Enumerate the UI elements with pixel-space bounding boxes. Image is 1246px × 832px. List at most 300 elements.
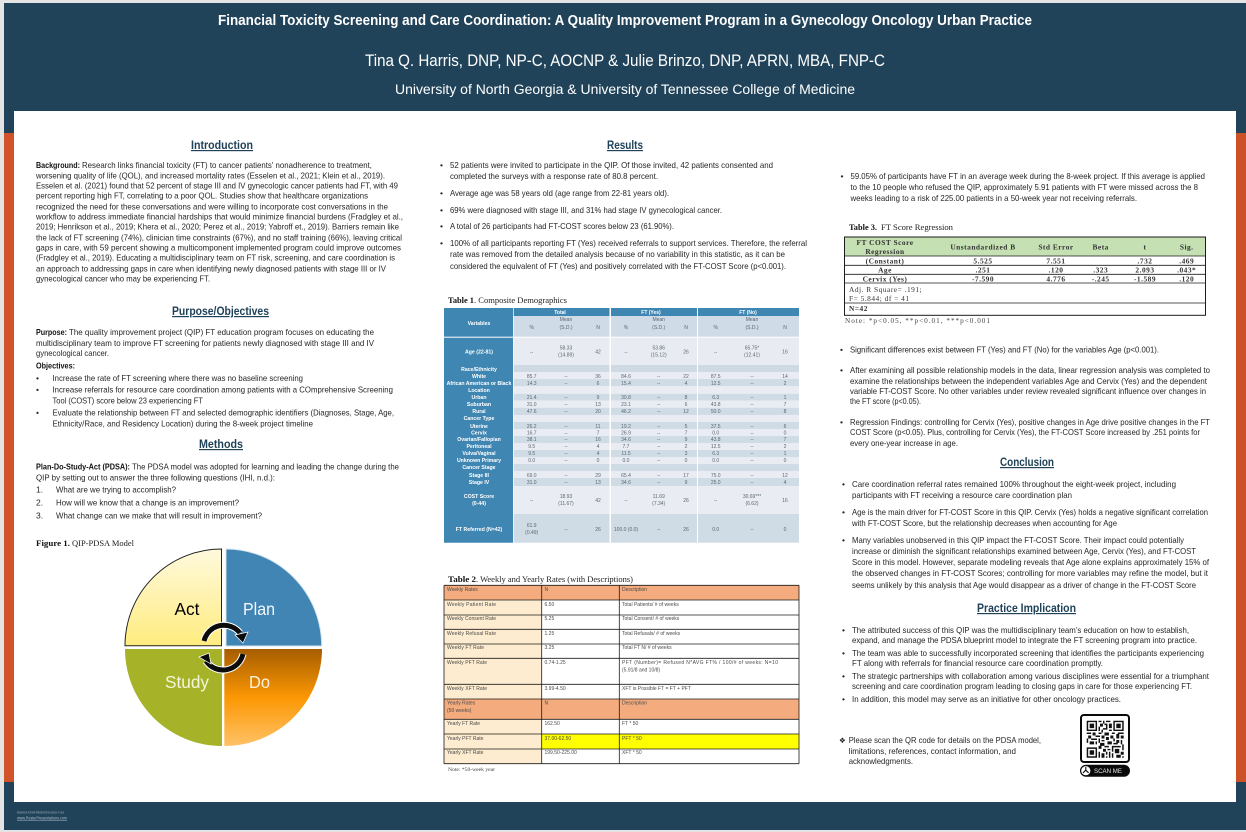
table 1: composite demographics: -- <box>714 350 718 356</box>
table 3: FT score regression: 7.551 <box>1046 256 1066 266</box>
table 1: composite demographics: -- <box>564 458 568 464</box>
text: significance and regression bullets: • <box>840 365 843 375</box>
table 1: composite demographics: -- <box>750 473 754 479</box>
table 1: composite demographics: 0 <box>597 458 600 464</box>
text: background paragraph: recognized the need for these conversations and were willing to incorporate cost conversations in the <box>36 202 388 212</box>
quadrant: Do <box>224 649 322 746</box>
text: weekly FT average bullet: to the 10 people who refused the QIP, approximately 5.91 patients with FT were missed across the 8 <box>850 182 1198 192</box>
table 1: composite demographics: 0.0 <box>712 458 719 464</box>
table 1: composite demographics: -- <box>564 374 568 380</box>
right orange side bar <box>1236 133 1246 782</box>
table 3: FT score regression: N=42 <box>849 304 868 313</box>
table 3: FT score regression: Regression <box>865 247 905 256</box>
footer credit: RESEARCH POSTER PRESENTATION DESIGN © 2019 <box>17 810 64 814</box>
table 1: composite demographics: -- <box>657 374 661 380</box>
table 3: FT score regression: F= 5.844; df = 41 <box>849 294 910 303</box>
text: purpose paragraph <box>36 327 374 358</box>
table 2: weekly and yearly rates: Total Patients/ # of weeks <box>622 602 679 608</box>
table 1: composite demographics: -- <box>750 444 754 450</box>
text: practice implication bullets: • <box>842 694 845 704</box>
text: results bullets: • <box>440 188 443 198</box>
table 1: composite demographics: -- <box>750 480 754 486</box>
table 2: weekly and yearly rates: 3.25 <box>544 645 554 651</box>
text: background paragraph: an approach to addressing gaps in care when identifying newly diagnosed patients with stage III or IV <box>36 264 386 274</box>
table 1: composite demographics: 26 <box>683 498 689 504</box>
table 1: composite demographics: 65.75* <box>745 346 759 352</box>
text: significance and regression bullets: COST Score (p<0.05). Plus, controlling for Cervix (Yes), the FT-COST Score increased by .251 points for <box>850 427 1200 437</box>
table 1: composite demographics: 26.2 <box>527 424 537 430</box>
table 1: composite demographics: -- <box>657 395 661 401</box>
text: results bullets: completed the surveys with a response rate of 80.8 percent. <box>450 171 658 181</box>
text: practice implication bullets: The attributed success of this QIP was the multidisciplinary team’s education on how to establish, <box>852 625 1189 635</box>
table 1: composite demographics: 58.33 <box>560 346 572 352</box>
text: significance and regression bullets: After examining all possible relationship models in the data, linear regression analysis was completed to <box>850 365 1210 375</box>
table 1: composite demographics: 53.86 <box>652 346 665 352</box>
text: results bullets: • <box>440 238 443 248</box>
table 3: FT score regression: Std Error <box>1038 242 1074 252</box>
table 1: composite demographics: COST Score <box>464 494 494 500</box>
text: background paragraph: Research links financial toxicity (FT) to cancer patients' nonadherence to treatment, <box>82 160 372 170</box>
table 1: composite demographics: 7 <box>597 430 600 436</box>
text: PDSA description <box>36 462 399 520</box>
text: objectives list: Increase referrals for resource care coordination among patients with a COmprehensive Screening <box>52 384 393 394</box>
text: objectives list <box>36 360 394 428</box>
text: background paragraph: the lack of FT screening (74%), clinician time constraints (67%), and no staff training (66%), leaving critical <box>36 232 402 242</box>
text: PDSA description: Plan-Do-Study-Act (PDSA): <box>36 462 130 472</box>
quadrant: Act <box>125 549 222 646</box>
table 1: composite demographics: 8 <box>784 409 787 415</box>
table 1: composite demographics: -- <box>750 458 754 464</box>
table 2 note: Note: *50-week year <box>448 767 495 773</box>
table 1: composite demographics: 18.93 <box>560 494 572 500</box>
table 2: weekly and yearly rates: N <box>544 587 548 593</box>
text: objectives list: • <box>36 373 39 383</box>
text: results bullets: considered the equivalent of FT (Yes) and positively correlated with the FT-COST Score (p<0.001). <box>450 261 786 271</box>
text: background paragraph: worsening quality of life (QOL), and increased mortality rates (Esselen et al., 2021; Klein et al., 2019). <box>35 170 385 180</box>
table 1: composite demographics: Ovarian/Fallopian <box>457 437 501 443</box>
table 1: composite demographics: 46.2 <box>621 409 631 415</box>
text: purpose paragraph: gynecological cancer. <box>36 348 109 358</box>
authors: Tina Q. Harris, DNP, NP-C, AOCNP & Julie Brinzo, DNP, APRN, MBA, FNP-C <box>365 52 885 70</box>
table 1: composite demographics: 21.4 <box>527 395 537 401</box>
table 1: composite demographics: Cancer Type <box>464 416 494 422</box>
table 1: composite demographics: (0-44) <box>472 501 486 507</box>
table 1: composite demographics: -- <box>657 451 661 457</box>
table 1: composite demographics: 9 <box>685 437 688 443</box>
table 1: composite demographics: -- <box>564 437 568 443</box>
table 1: composite demographics: 69.0 <box>527 473 537 479</box>
text: conclusion bullets: Age is the main driver for FT-COST Score in this QIP. Cervix (Yes) holds a negative significant correlation <box>852 507 1208 517</box>
table 2: weekly and yearly rates: Yearly PFT Rate <box>447 736 484 742</box>
text: results bullets: • <box>440 221 443 231</box>
text: significance and regression bullets: Significant differences exist between FT (Yes) and FT (No) for the variables Age (p<0.001). <box>850 344 1159 354</box>
table 1: composite demographics: 61.9 <box>527 523 537 529</box>
text: practice implication bullets: • <box>842 671 845 681</box>
table 1: composite demographics: % <box>624 325 629 331</box>
table 1: composite demographics: (0.49) <box>525 530 539 536</box>
figure caption <box>36 538 135 548</box>
arrow: clockwise top <box>204 625 248 643</box>
table 1: composite demographics: FT (Yes) <box>641 310 661 316</box>
text: background paragraph: Background: <box>36 160 80 170</box>
table 1: composite demographics: 1 <box>784 451 787 457</box>
text: objectives list: • <box>36 408 39 418</box>
table 1: composite demographics: -- <box>750 374 754 380</box>
text: significance and regression bullets <box>840 344 1210 448</box>
quadrant: Study <box>125 649 222 746</box>
table 1: composite demographics: 31.0 <box>527 480 537 486</box>
table 3 caption: FT Score Regression <box>881 222 954 232</box>
table 1: composite demographics: African American or Black <box>447 381 511 387</box>
quadrant: Plan <box>226 549 322 646</box>
text: QR code note: Please scan the QR code for details on the PDSA model, <box>849 735 1041 745</box>
table 1: composite demographics: 30.69*** <box>743 494 761 500</box>
text: significance and regression bullets: • <box>840 417 843 427</box>
text: conclusion bullets: participants with FT receiving a resource care coordination plan <box>852 490 1072 500</box>
text: background paragraph: gynecological cancer who may be experiencing FT. <box>36 274 210 284</box>
text: conclusion bullets: Many variables unobserved in this QIP impact the FT-COST Score. Their impact could potentially <box>852 535 1185 545</box>
text: purpose paragraph: The quality improvement project (QIP) FT education program focuses on educating the <box>69 327 374 337</box>
table 2: weekly and yearly rates: 1.25 <box>544 631 554 637</box>
table 1: composite demographics: Location <box>468 388 490 394</box>
table 1: composite demographics: 75.0 <box>711 473 721 479</box>
text: QR code note: acknowledgments. <box>849 756 913 766</box>
table 1: composite demographics: 0.0 <box>528 458 535 464</box>
table 3: FT score regression: -1.589 <box>1134 274 1156 284</box>
table 2 caption: . Weekly and Yearly Rates (with Descriptions) <box>476 574 633 584</box>
quadrant: Do: Do <box>249 672 270 692</box>
text: practice implication bullets: FT along with referrals for financial resource care coordination promptly. <box>852 658 1103 668</box>
table 1: composite demographics: 12.5 <box>711 381 721 387</box>
table 1: composite demographics: 25.0 <box>711 480 721 486</box>
table 1: composite demographics: -- <box>657 381 661 387</box>
table 1: composite demographics: 6 <box>597 381 600 387</box>
table 1: composite demographics: Mean <box>652 317 665 323</box>
table 1: composite demographics: 100.0 (0.0) <box>614 527 638 533</box>
table 1: composite demographics: 0.0 <box>712 527 719 533</box>
table 1: composite demographics: 22 <box>683 374 689 380</box>
text: conclusion bullets <box>842 479 1210 590</box>
table 2: weekly and yearly rates: Yearly FT Rate <box>447 721 480 727</box>
table 1: composite demographics: 9 <box>685 480 688 486</box>
chart: PDSA cycle diagram <box>125 549 322 746</box>
table 1: composite demographics: -- <box>750 451 754 457</box>
table 1: composite demographics: Vulva/Vaginal <box>462 451 496 457</box>
table 1: composite demographics: 50.0 <box>711 409 721 415</box>
text: results bullets: 69% were diagnosed with stage III, and 31% had stage IV gynecological cancer. <box>450 205 722 215</box>
table 3: FT score regression: .120 <box>1049 266 1063 274</box>
figure caption: Figure 1. <box>36 538 70 548</box>
table 2: weekly and yearly rates: Description <box>622 587 647 593</box>
text: conclusion bullets: increase or diminish the significant relationships examined between Age, Cervix (Yes), and FT-COST <box>852 546 1196 556</box>
table 1: composite demographics: -- <box>657 437 661 443</box>
text: QR code note: limitations, references, contact information, and <box>849 746 1016 756</box>
arrow: clockwise bottom <box>199 653 243 670</box>
text: purpose paragraph: multidisciplinary team to improve FT screening for patients newly diagnosed with stage III and IV <box>36 338 374 348</box>
table 1: composite demographics: -- <box>657 444 661 450</box>
text: conclusion bullets: • <box>842 479 845 489</box>
text: PDSA description: 2. <box>36 498 43 508</box>
table 1: composite demographics: 3 <box>685 451 688 457</box>
table 1: composite demographics: -- <box>657 480 661 486</box>
table 1: composite demographics: (7.34) <box>652 501 666 507</box>
table 2: weekly and yearly rates: Weekly Refusal Rate <box>447 631 496 637</box>
table 3: FT score regression: Sig. <box>1180 242 1194 252</box>
table 1: composite demographics: 6 <box>784 424 787 430</box>
table 2: weekly and yearly rates: PFT * 50 <box>622 736 642 742</box>
table 1: composite demographics: -- <box>564 430 568 436</box>
table 3: FT score regression: t <box>1144 242 1147 252</box>
text: results bullets: 100% of all participants reporting FT (Yes) received referrals to support services. Therefore, the referral <box>450 238 807 248</box>
text: conclusion bullets: • <box>842 535 845 545</box>
footer credit <box>17 810 67 820</box>
text: significance and regression bullets: examine the relationships between the independent variables Age and Cervix (Yes) and the dependent <box>850 376 1208 386</box>
table 1: composite demographics: 16.7 <box>527 430 537 436</box>
table 1: composite demographics: (S.D.) <box>652 325 666 331</box>
table 1: composite demographics: -- <box>750 424 754 430</box>
table 2: weekly and yearly rates: Description <box>622 700 647 706</box>
table 2: weekly and yearly rates: Total FT N/ # of weeks <box>622 645 672 651</box>
table 1: composite demographics: (6.62) <box>745 501 759 507</box>
table 2: weekly and yearly rates: 37.00-62.50 <box>544 736 571 742</box>
table 1: composite demographics: 43.8 <box>711 402 721 408</box>
table 1: composite demographics: -- <box>750 430 754 436</box>
table 1: composite demographics: -- <box>564 424 568 430</box>
table 1: composite demographics: Mean <box>560 317 572 323</box>
table 1: composite demographics: Uterine <box>470 424 488 430</box>
table 2: weekly and yearly rates: 0.74-1.25 <box>544 660 566 666</box>
text: objectives list: Objectives: <box>36 360 75 370</box>
table 1: composite demographics: 7 <box>784 402 787 408</box>
table 1: composite demographics: 2 <box>685 444 688 450</box>
table 3: FT score regression: 5.525 <box>973 256 993 266</box>
table 1: composite demographics: Variables <box>468 321 490 327</box>
table 1: composite demographics: Unknown Primary <box>457 458 501 464</box>
table 1: composite demographics: 36 <box>595 374 601 380</box>
table 1: composite demographics: 0.0 <box>712 430 719 436</box>
text: background paragraph: gaps in care, with 59 percent showing a multicomponent implemented program could improve outcomes <box>36 242 401 252</box>
quadrant: Study: Study <box>165 672 209 692</box>
table 1: composite demographics: (12.41) <box>744 352 760 358</box>
table 1: composite demographics: -- <box>657 458 661 464</box>
text: results bullets: Average age was 58 years old (age range from 22-81 years old). <box>450 188 669 198</box>
table 1: composite demographics: 19.2 <box>621 424 631 430</box>
table 1: composite demographics: 8 <box>685 395 688 401</box>
table 1: composite demographics: Rural <box>472 409 486 415</box>
table 1: composite demographics: -- <box>564 451 568 457</box>
text: PDSA description: What are we trying to accomplish? <box>56 484 176 494</box>
heading: results: Results <box>607 138 643 152</box>
table 1: composite demographics: 9.5 <box>528 444 535 450</box>
table 1 caption: Table 1 <box>448 295 474 305</box>
quadrant: Plan: Plan <box>243 599 275 619</box>
table 3: FT score regression: .732 <box>1138 256 1152 266</box>
table 1: composite demographics: -- <box>530 350 534 356</box>
table 2: weekly and yearly rates: Yearly XFT Rate <box>447 750 484 756</box>
table 1: composite demographics: 7 <box>784 437 787 443</box>
table 1: composite demographics: -- <box>657 402 661 408</box>
heading: methods: Methods <box>199 437 243 451</box>
table 1: composite demographics: 23.1 <box>621 402 631 408</box>
table 3: FT score regression: FT COST Score <box>856 238 914 247</box>
table 2: weekly and yearly rates: Weekly Consent Rate <box>447 616 496 622</box>
table 1 caption: . Composite Demographics <box>474 295 568 305</box>
table 1: composite demographics: Urban <box>472 395 486 401</box>
table 1: composite demographics: FT (No) <box>739 310 757 316</box>
table 1: composite demographics: -- <box>714 498 718 504</box>
table 1: composite demographics: N <box>783 325 787 331</box>
text: conclusion bullets: • <box>842 507 845 517</box>
table 1: composite demographics: 87.5 <box>711 374 721 380</box>
table 1: composite demographics: Total <box>554 310 566 316</box>
table 1: composite demographics: 13 <box>595 402 601 408</box>
table 1: composite demographics: 29 <box>595 473 601 479</box>
text: practice implication bullets: screening and care coordination program leading to closing gaps in care for those experiencing FT. <box>852 681 1192 691</box>
table 1: composite demographics: 0 <box>784 458 787 464</box>
table 3: FT score regression: .323 <box>1093 266 1108 274</box>
table 3: FT score regression: .043* <box>1177 266 1196 274</box>
table 3 caption: Table 3. <box>849 222 877 232</box>
table 1: composite demographics: (14.89) <box>558 352 574 358</box>
text: results bullets: • <box>440 205 443 215</box>
text: PDSA description: 3. <box>36 510 43 520</box>
table 1: composite demographics: -- <box>750 409 754 415</box>
text: QR code note <box>839 735 1041 766</box>
table 2: weekly and yearly rates: (50 weeks) <box>447 708 472 714</box>
table 2: weekly and yearly rates: 6.50 <box>544 602 554 608</box>
footer credit: www.PosterPresentations.com <box>17 816 67 820</box>
table 1: composite demographics: 11 <box>595 424 601 430</box>
text: objectives list: Ethnicity/Race, and Residency Location) during the 8-week project timeline <box>52 418 313 428</box>
text: significance and regression bullets: • <box>840 344 843 354</box>
table 1: composite demographics: -- <box>750 527 754 533</box>
table 1: composite demographics: -- <box>750 381 754 387</box>
table 1: composite demographics: (S.D.) <box>559 325 573 331</box>
table 3: FT score regression: .469 <box>1179 256 1194 266</box>
table 2: weekly and yearly rates: Weekly FT Rate <box>447 645 484 651</box>
text: practice implication bullets: In addition, this model may serve as an initiative for other oncology practices. <box>852 694 1121 704</box>
table 3: FT score regression: .251 <box>976 266 990 274</box>
table 1: composite demographics: 26 <box>683 527 689 533</box>
table 2: weekly and yearly rates: Weekly PFT Rate <box>447 660 487 666</box>
text: practice implication bullets: • <box>842 625 845 635</box>
table 3: FT score regression: -7.590 <box>972 274 994 284</box>
table 1: composite demographics: 14 <box>782 374 788 380</box>
table 1: composite demographics: Age (22-81) <box>465 350 493 356</box>
table 1: composite demographics: 42 <box>595 498 601 504</box>
table 1: composite demographics: -- <box>564 381 568 387</box>
left orange side bar <box>4 133 14 782</box>
text: objectives list: Increase the rate of FT screening where there was no baseline screening <box>52 373 303 383</box>
table 1: composite demographics: -- <box>657 409 661 415</box>
text: significance and regression bullets: variable FT-COST Score. No other variables under review revealed significant influence over changes in <box>850 386 1206 396</box>
table 1: composite demographics: -- <box>750 395 754 401</box>
table 3: FT score regression: 4.776 <box>1046 274 1066 284</box>
table 1: composite demographics: 14.3 <box>527 381 537 387</box>
table 2: weekly and yearly rates: (5.91/8 and 10/8) <box>622 668 660 674</box>
table 1: composite demographics: 9 <box>597 395 600 401</box>
affiliations: University of North Georgia & University of Tennessee College of Medicine <box>395 82 855 98</box>
table 2: weekly and yearly rates: Total Refusals/ # of weeks <box>622 631 681 637</box>
table 3 note: Note: *p<0.05, **p<0.01, ***p<0.001 <box>845 317 990 325</box>
table 3: FT score regression: Age <box>878 266 892 274</box>
table 1: composite demographics: 38.1 <box>527 437 537 443</box>
text: results bullets <box>440 160 807 271</box>
table 1: composite demographics: (15.12) <box>651 352 667 358</box>
table 1: composite demographics: 31.0 <box>527 402 537 408</box>
text: background paragraph: percent reporting high FT, correlating to a poor QOL. Studies show that healthcare organizations <box>36 190 368 200</box>
table 1: composite demographics: 2 <box>784 381 787 387</box>
table 1: composite demographics: 2 <box>784 444 787 450</box>
table 2: weekly and yearly rates: Total Consent/ # of weeks <box>622 616 680 622</box>
heading: purpose/objectives: Purpose/Objectives <box>172 304 269 318</box>
table 1: composite demographics: (S.D.) <box>745 325 759 331</box>
text: results bullets: 52 patients were invited to participate in the QIP. Of those invited, 42 patients consented and <box>450 160 773 170</box>
table 3: FT score regression: Adj. R Square= .191; <box>849 285 922 294</box>
table 1: composite demographics: 43.8 <box>711 437 721 443</box>
table 1: composite demographics: -- <box>657 527 661 533</box>
text: weekly FT average bullet: • <box>840 171 844 181</box>
table 1: composite demographics: Stage IV <box>469 480 490 486</box>
text: conclusion bullets: the observed changes in FT-COST Scores; controlling for more variables may refine the model, but it <box>852 568 1209 578</box>
quadrant: Act: Act <box>174 599 200 619</box>
table 1: composite demographics: -- <box>657 473 661 479</box>
icon: scan me badge <box>1080 765 1130 777</box>
text: practice implication bullets: • <box>842 648 845 658</box>
text: practice implication bullets: The team was able to successfully incorporated screening that identifies the participants experiencing <box>852 648 1204 658</box>
table 1: composite demographics: 4 <box>597 451 600 457</box>
text: conclusion bullets: Care coordination referral rates remained 100% throughout the eight-week project, including <box>852 479 1176 489</box>
table 1: composite demographics: % <box>529 325 534 331</box>
table 1: composite demographics: 12 <box>683 409 689 415</box>
table 1: composite demographics: 4 <box>784 480 787 486</box>
table 1: composite demographics: 20 <box>595 409 601 415</box>
text: objectives list: • <box>36 384 39 394</box>
table 1: composite demographics: Cancer Stage <box>462 465 496 471</box>
table 1: composite demographics: Cervix <box>471 430 487 436</box>
table 1: composite demographics: 16 <box>782 350 788 356</box>
table 3: FT score regression: Beta <box>1093 242 1109 252</box>
table 1: composite demographics: 9.5 <box>528 451 535 457</box>
table 1: composite demographics: -- <box>564 480 568 486</box>
text: weekly FT average bullet <box>840 171 1205 203</box>
text: conclusion bullets: seems unlikely by this analysis that Age would disappear as a driver of change in the FT-COST Score <box>852 580 1196 590</box>
table 1: composite demographics: Peritoneal <box>466 444 492 450</box>
table 1: composite demographics: 26 <box>683 350 689 356</box>
table 1: composite demographics: N <box>596 325 600 331</box>
table 1: composite demographics: 16 <box>782 498 788 504</box>
table 1: composite demographics: 4 <box>597 444 600 450</box>
table 1: composite demographics: 7.7 <box>623 444 630 450</box>
table 2 caption: Table 2 <box>448 574 477 584</box>
text: significance and regression bullets: the FT score (p<0.05). <box>850 396 921 406</box>
table 1: composite demographics: 11.5 <box>621 451 631 457</box>
table 1: composite demographics: -- <box>530 498 534 504</box>
heading: practice implication: Practice Implication <box>977 601 1076 615</box>
heading: conclusion: Conclusion <box>1000 455 1054 469</box>
text: practice implication bullets <box>842 625 1210 704</box>
table 1: composite demographics: -- <box>657 424 661 430</box>
table 1: composite demographics: 34.6 <box>621 437 631 443</box>
table 1: composite demographics: 26 <box>595 527 601 533</box>
text: PDSA description: QIP by setting out to answer the three following questions (IHI, n.d.): <box>36 472 275 482</box>
table 2: weekly and yearly rates: 5.25 <box>544 616 554 622</box>
table 1: composite demographics: 15.4 <box>621 381 631 387</box>
table 2: weekly and yearly rates: Weekly Rates <box>447 587 478 593</box>
table 1: composite demographics: 30.8 <box>621 395 631 401</box>
text: objectives list: Evaluate the relationship between FT and selected demographic identifiers (Diagnoses, Stage, Age, <box>52 408 394 418</box>
table 1: composite demographics: Stage III <box>469 473 489 479</box>
